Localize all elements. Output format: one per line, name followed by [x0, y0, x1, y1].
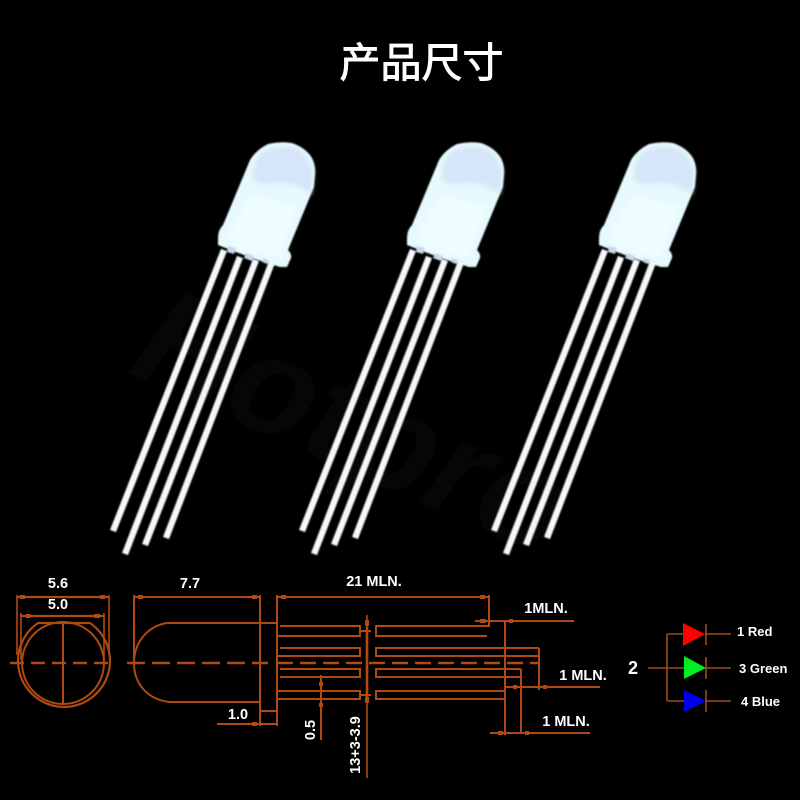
- LED photo 3: [494, 142, 696, 554]
- pin labels: 4 Blue: [741, 694, 780, 709]
- dimension labels: 1MLN.: [524, 601, 568, 617]
- dimension labels: 0.5: [303, 720, 319, 740]
- watermark: Hotpro: [114, 256, 597, 586]
- pin labels: 3 Green: [739, 661, 787, 676]
- dimension labels: 21 MLN.: [346, 574, 402, 590]
- title: 产品尺寸: [340, 40, 504, 86]
- dimension labels: 1 MLN.: [542, 714, 590, 730]
- pin labels: 2: [628, 658, 638, 678]
- dimension labels: 1.0: [228, 707, 248, 723]
- front view drawing: [10, 595, 110, 707]
- dimension labels: 5.6: [48, 576, 68, 592]
- RGB pin diagram: [628, 623, 787, 712]
- side view drawing: [127, 595, 277, 726]
- LED photo 1: [113, 142, 315, 554]
- icon: green diode: [684, 656, 706, 679]
- pin dimension drawing: [277, 595, 600, 778]
- dimension labels: [48, 574, 607, 774]
- pin labels: 1 Red: [737, 624, 772, 639]
- icon: blue diode: [684, 690, 706, 712]
- dimension labels: 5.0: [48, 597, 68, 613]
- pin labels: [628, 624, 787, 709]
- LED photo 2: [302, 142, 504, 554]
- dimension labels: 7.7: [180, 576, 200, 592]
- icon: red diode: [683, 623, 705, 646]
- dimension labels: 13+3-3.9: [348, 716, 364, 774]
- dimension labels: 1 MLN.: [559, 668, 607, 684]
